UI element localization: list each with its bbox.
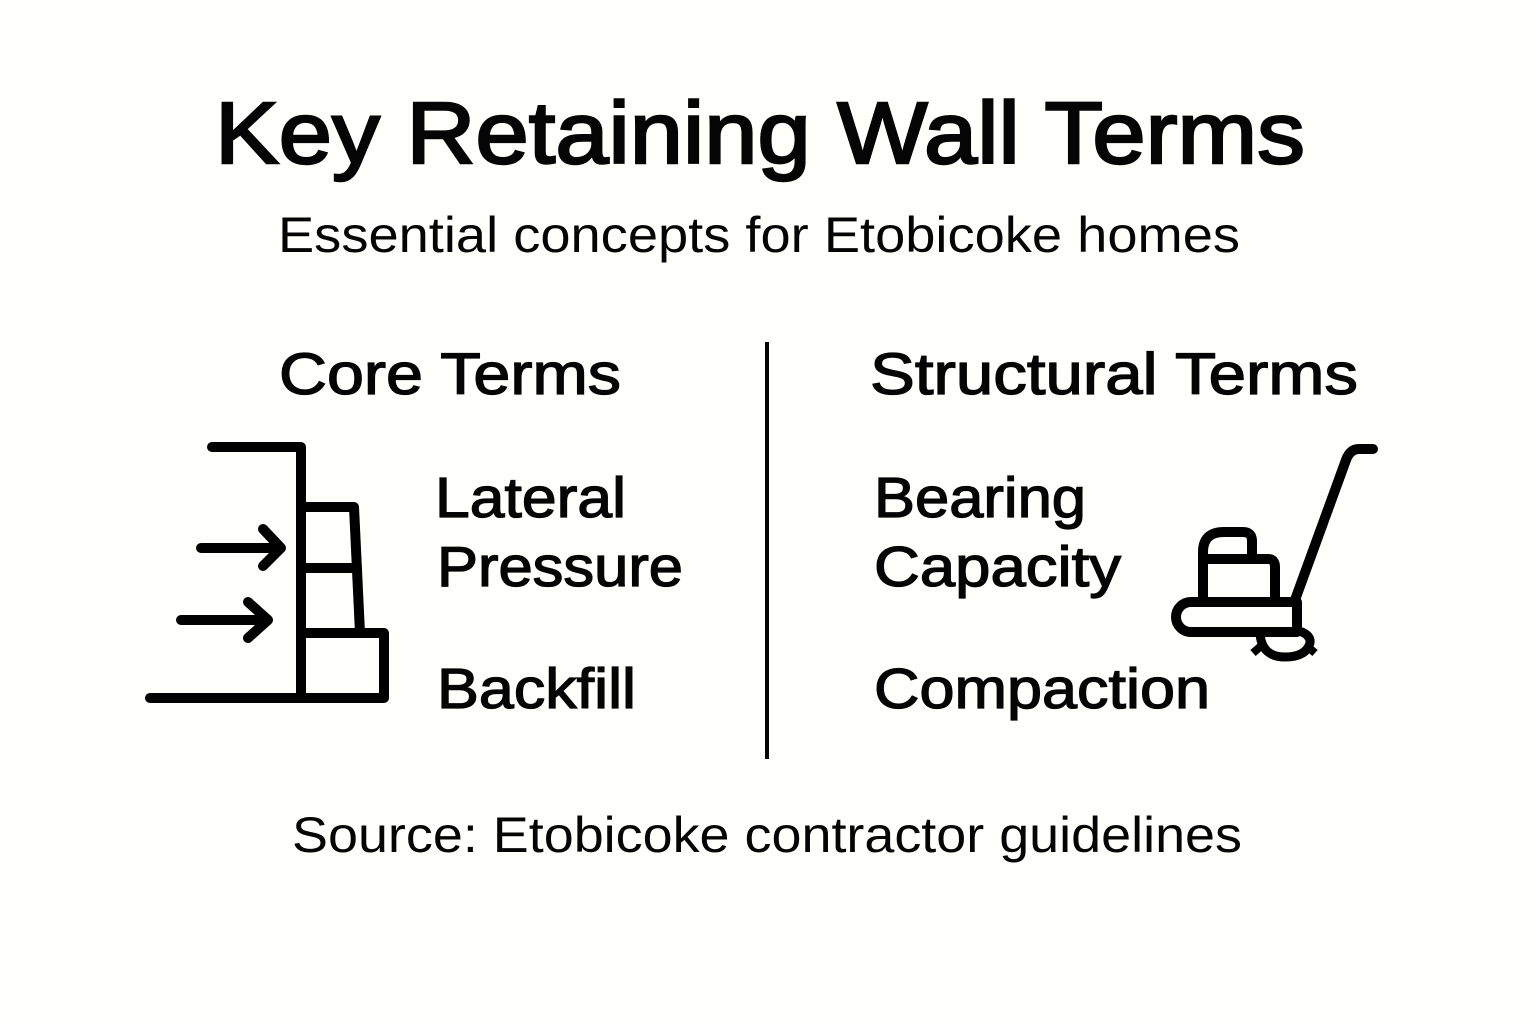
term: lateral pressure: Lateral (435, 466, 626, 530)
icon: plate compactor (1176, 449, 1373, 657)
term: compaction: Compaction (874, 657, 1210, 721)
term: backfill: Backfill (437, 657, 636, 721)
term: bearing capacity: Capacity (874, 535, 1122, 599)
source note: Source: Etobicoke contractor guidelines (292, 807, 1242, 863)
term: lateral pressure: Pressure (437, 535, 683, 599)
term: lateral pressure (435, 466, 683, 599)
icon: retaining wall with pressure arrows (150, 447, 384, 698)
heading: core terms: Core Terms (279, 342, 621, 407)
heading: structural terms: Structural Terms (870, 342, 1358, 407)
title: Key Retaining Wall Terms (215, 85, 1305, 182)
divider (765, 342, 769, 759)
term: bearing capacity (874, 466, 1122, 599)
subtitle: Essential concepts for Etobicoke homes (278, 207, 1240, 263)
term: bearing capacity: Bearing (874, 466, 1086, 530)
